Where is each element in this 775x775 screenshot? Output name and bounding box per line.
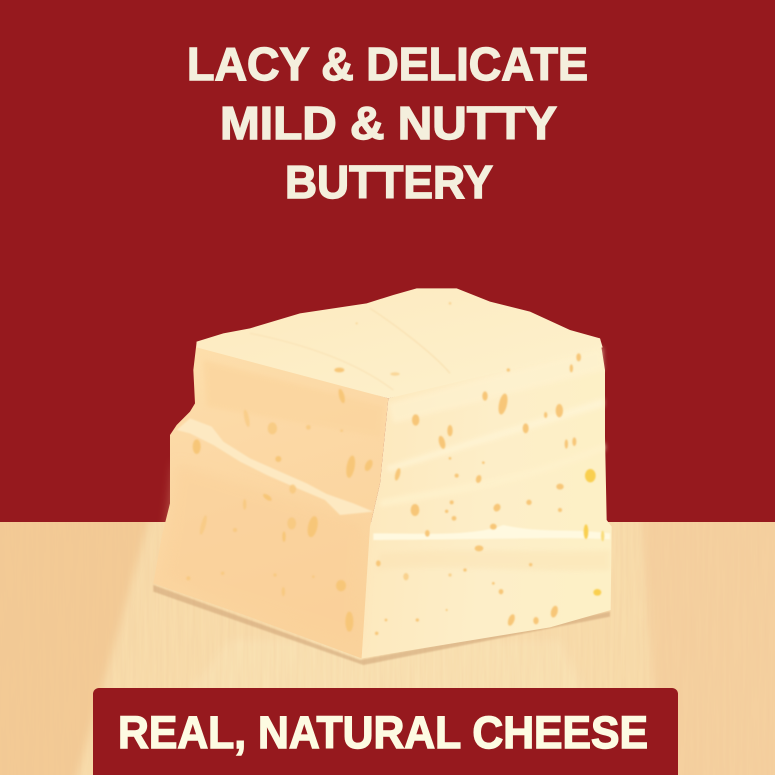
wood table surface (0, 500, 775, 775)
crumbled crack across the left face (177, 418, 373, 515)
right face of cheese (362, 338, 612, 658)
banner text: real natural cheese: REAL, NATURAL CHEESE (118, 707, 648, 758)
cheese block photo illustration (153, 288, 612, 665)
title: cheese characteristics (187, 38, 588, 208)
contact shadow under cheese (153, 585, 610, 665)
title line: buttery: BUTTERY (285, 156, 493, 208)
banner background (93, 688, 678, 775)
title line: lacy and delicate: LACY & DELICATE (187, 38, 588, 90)
bottom banner (93, 688, 678, 775)
cheese holes (186, 302, 604, 635)
soft shading and highlights (163, 308, 610, 643)
top face of cheese (197, 288, 603, 398)
left face of cheese (153, 342, 388, 658)
title line: mild and nutty: MILD & NUTTY (220, 97, 557, 149)
